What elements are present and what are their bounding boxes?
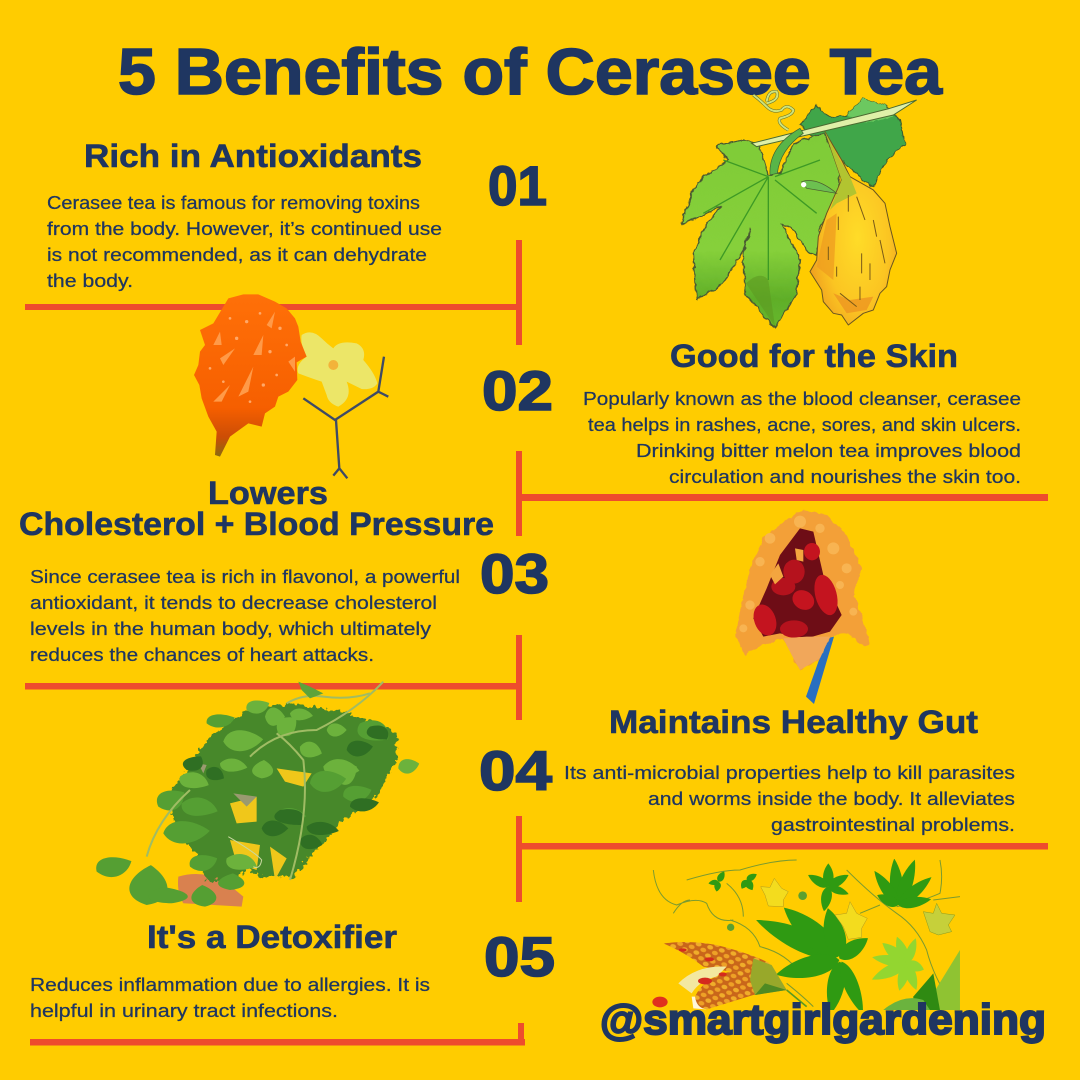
panel: benefit 02 good for the skin (482, 338, 1048, 536)
text block: cholesterol body: Since cerasee tea is rich in flavonol, a powerful (30, 566, 460, 587)
heading: lowers cholesterol and blood pressure: Lowers (208, 475, 328, 511)
title: 5 Benefits of Cerasee Tea (118, 35, 943, 108)
text block: skin body: tea helps in rashes, acne, sores, and skin ulcers. (588, 414, 1021, 435)
number 05: 05 (484, 925, 555, 988)
connector line 01 (25, 240, 522, 345)
number 03: 03 (480, 542, 549, 605)
panel: benefit 01 rich in antioxidants (25, 138, 547, 345)
panel: benefit 04 maintains healthy gut (479, 704, 1048, 902)
text block: gut body: and worms inside the body. It alleviates (648, 788, 1015, 809)
text block: cholesterol body (30, 566, 460, 665)
text block: gut body (564, 762, 1015, 835)
text block: cholesterol body: antioxidant, it tends to decrease cholesterol (30, 592, 437, 613)
text block: detoxifier body: helpful in urinary tract infections. (30, 1000, 338, 1021)
icon: orange bitter melon with flower and twig (194, 294, 388, 478)
text block: antioxidants body: is not recommended, as it can dehydrate (47, 244, 427, 265)
text block: antioxidants body (47, 192, 442, 291)
icon: opened cerasee fruit with red seeds (735, 510, 870, 704)
icon: botanical cerasee illustration (652, 857, 960, 1017)
heading: it's a detoxifier: It's a Detoxifier (147, 919, 397, 955)
text block: skin body (583, 388, 1021, 487)
icon: potted cerasee plant (90, 682, 421, 907)
number 01: 01 (488, 154, 547, 217)
text block: detoxifier body (30, 974, 430, 1021)
heading: good for the skin: Good for the Skin (670, 338, 958, 374)
connector line 04 (516, 816, 1048, 902)
heading: lowers cholesterol and blood pressure (19, 475, 494, 542)
connector line 03 (25, 635, 522, 720)
text block: detoxifier body: Reduces inflammation due to allergies. It is (30, 974, 430, 995)
number 04: 04 (479, 739, 552, 802)
icon: cerasee vine leaf and yellow fruit (682, 91, 917, 328)
text block: cholesterol body: levels in the human body, which ultimately (30, 618, 432, 639)
text block: antioxidants body: from the body. However, it’s continued use (47, 218, 442, 239)
text block: skin body: circulation and nourishes the skin too. (669, 466, 1021, 487)
connector line 02 (516, 451, 1048, 536)
text block: antioxidants body: the body. (47, 270, 133, 291)
text block: gut body: Its anti-microbial properties help to kill parasites (564, 762, 1015, 783)
heading: maintains healthy gut: Maintains Healthy Gut (609, 704, 978, 740)
panel: benefit 05 it's a detoxifier (30, 919, 555, 1046)
text block: antioxidants body: Cerasee tea is famous for removing toxins (47, 192, 420, 213)
text block: skin body: Drinking bitter melon tea improves blood (636, 440, 1021, 461)
text block: skin body: Popularly known as the blood cleanser, cerasee (583, 388, 1021, 409)
text block: gut body: gastrointestinal problems. (771, 814, 1015, 835)
text block: cholesterol body: reduces the chances of heart attacks. (30, 644, 374, 665)
connector line 05 (30, 1023, 525, 1046)
panel: benefit 03 lowers cholesterol (19, 475, 549, 720)
heading: rich in antioxidants: Rich in Antioxidants (84, 138, 422, 174)
number 02: 02 (482, 359, 553, 422)
handle: smartgirlgardening: @smartgirlgardening (600, 996, 1046, 1044)
heading: lowers cholesterol and blood pressure: Cholesterol + Blood Pressure (19, 506, 494, 542)
